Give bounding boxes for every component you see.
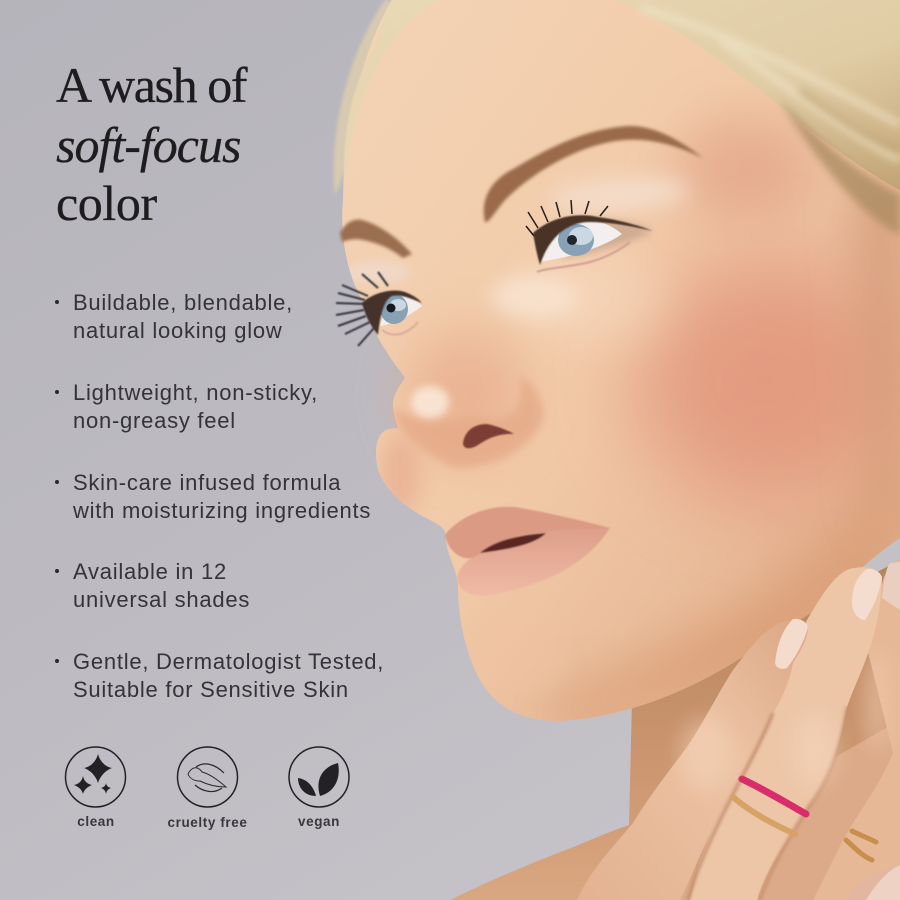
bullet: gentle (73, 648, 384, 704)
cheek blush (635, 260, 895, 500)
bullet: buildable: Buildable, blendable, (73, 290, 293, 315)
nails (775, 619, 808, 669)
hair top (362, 0, 900, 190)
bullet: lightweight: non-greasy feel (73, 408, 236, 433)
title: A wash of (56, 57, 246, 113)
title: soft-focus (56, 117, 240, 173)
right eye (526, 200, 653, 272)
title (56, 57, 248, 231)
bullet: gentle: Gentle, Dermatologist Tested, (73, 649, 384, 674)
neck and shoulder (450, 560, 900, 900)
icon: vegan leaves (289, 747, 349, 807)
left eye (336, 272, 422, 346)
pink ring (742, 779, 806, 814)
right eyebrow (484, 126, 703, 222)
bullet: skin-care: Skin-care infused formula (73, 470, 341, 495)
bullet: buildable (73, 289, 293, 345)
hair behind and left wisps (334, 0, 410, 195)
nose (393, 330, 543, 467)
gold rings (733, 797, 795, 834)
bullet: buildable: natural looking glow (73, 318, 282, 343)
index finger (577, 620, 808, 900)
label: vegan: vegan (298, 814, 340, 829)
palm base (680, 720, 900, 900)
label: cruelty free: cruelty free (168, 815, 248, 830)
bullet: lightweight (73, 379, 318, 435)
hand (577, 560, 900, 900)
bullet: skin-care: with moisturizing ingredients (73, 498, 371, 523)
icon row: clean, cruelty free, vegan (64, 746, 350, 808)
label: clean: clean (77, 814, 115, 829)
face (342, 0, 900, 735)
lips (445, 507, 610, 596)
jaw shading (542, 496, 900, 721)
bullet: shades: universal shades (73, 587, 250, 612)
finger creases and shading (688, 713, 773, 900)
bullet: lightweight: Lightweight, non-sticky, (73, 380, 318, 405)
pinky finger and nail (843, 865, 900, 900)
icon: clean sparkles (66, 747, 126, 807)
title: color (56, 175, 157, 231)
icon: cruelty free rabbit (178, 747, 238, 807)
bullet: shades: Available in 12 (73, 559, 227, 584)
bullet: skin-care (73, 469, 371, 525)
bullet: shades (73, 558, 250, 614)
highlights (490, 275, 580, 319)
middle finger (690, 567, 882, 900)
left eyebrow (340, 220, 412, 258)
third finger (813, 560, 900, 900)
bullet: gentle: Suitable for Sensitive Skin (73, 677, 349, 702)
